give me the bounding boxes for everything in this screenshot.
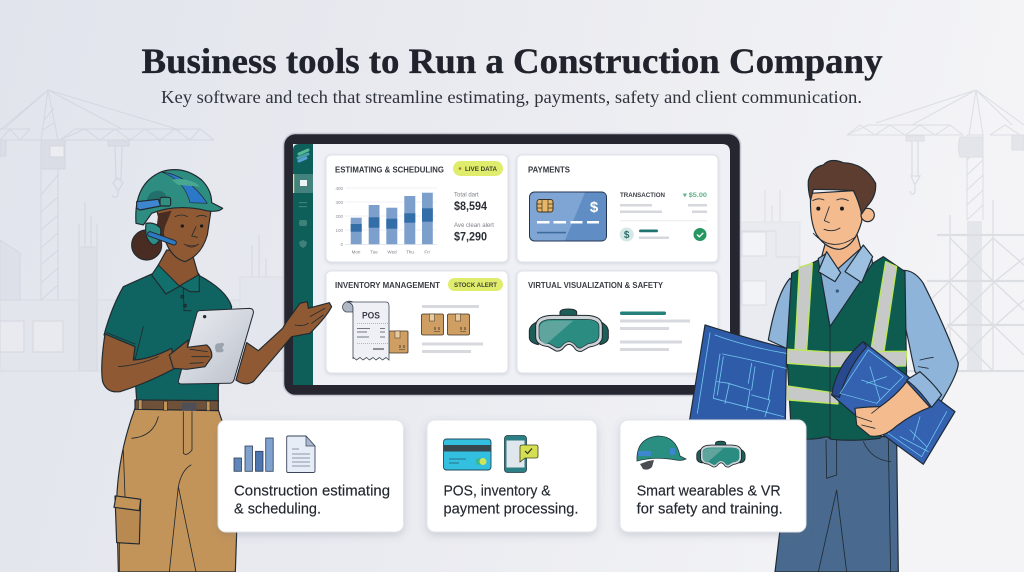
panel: inventory management bbox=[326, 271, 508, 373]
card text: for safety and training. bbox=[637, 502, 783, 518]
panel heading: ESTIMATING & SCHEDULING bbox=[335, 164, 444, 174]
card text: POS, inventory & bbox=[444, 484, 551, 500]
stats: $8,594 bbox=[454, 199, 487, 213]
bar chart: Thu bbox=[406, 250, 414, 254]
left arm bbox=[102, 334, 175, 392]
panel: virtual visualization and safety bbox=[517, 271, 718, 373]
bar chart: 400 bbox=[335, 186, 343, 191]
hair bun bbox=[132, 230, 162, 260]
left arm bbox=[768, 278, 795, 350]
title: Business tools to Run a Construction Company bbox=[142, 41, 882, 81]
pointing arm and hand bbox=[236, 302, 332, 384]
icon: POS receipt: POS bbox=[362, 310, 380, 320]
ear bbox=[861, 208, 874, 222]
transaction details: ▾ $5.00 bbox=[682, 192, 708, 199]
shirt front bbox=[818, 247, 873, 327]
bar chart: 100 bbox=[335, 228, 343, 233]
blueprint sheet bbox=[689, 325, 787, 422]
sidebar icons bbox=[299, 202, 307, 248]
icon: bar chart bbox=[234, 438, 273, 471]
stats: $7,290 bbox=[454, 230, 487, 244]
arm cuff bbox=[907, 372, 942, 407]
bar chart: Mon bbox=[352, 250, 361, 254]
eyes, nose and mouth bbox=[813, 199, 855, 244]
neck bbox=[822, 233, 862, 279]
sidebar bbox=[293, 144, 313, 385]
character: woman with tablet and hard hat bbox=[102, 170, 332, 572]
stats bbox=[454, 192, 494, 244]
card text: payment processing. bbox=[444, 502, 578, 518]
panel heading: INVENTORY MANAGEMENT bbox=[335, 280, 441, 290]
right arm bbox=[900, 270, 958, 403]
rolled blueprint bbox=[832, 342, 955, 464]
bar chart: 300 bbox=[335, 200, 343, 205]
bar chart: Tue bbox=[370, 250, 378, 254]
tablet bbox=[178, 308, 253, 384]
active sidebar item bbox=[293, 174, 313, 193]
tablet frame bbox=[284, 134, 740, 396]
icon: VR goggles bbox=[697, 441, 745, 467]
hard hat bbox=[136, 170, 223, 225]
panel heading: PAYMENTS bbox=[528, 164, 570, 174]
tablet dashboard bbox=[284, 134, 740, 396]
sidebar logo bbox=[298, 150, 308, 161]
card: smart wearables and VR bbox=[620, 420, 806, 532]
background: right crane and scaffold bbox=[740, 90, 1024, 372]
icon: phone with message bbox=[504, 436, 538, 472]
placeholder lines bbox=[422, 305, 483, 353]
placeholder lines bbox=[620, 312, 690, 351]
bar chart bbox=[335, 186, 437, 254]
icon: hard hat bbox=[637, 436, 686, 470]
bar chart: Fri bbox=[424, 250, 430, 254]
panel: payments bbox=[517, 155, 718, 262]
trousers bbox=[114, 408, 237, 572]
panel heading: VIRTUAL VISUALIZATION & SAFETY bbox=[528, 280, 663, 290]
icon: document bbox=[287, 436, 315, 472]
bar chart: 200 bbox=[335, 214, 343, 219]
neck bbox=[158, 250, 198, 286]
face bbox=[810, 190, 864, 249]
vest bbox=[787, 257, 907, 440]
icon: credit card: $ bbox=[590, 199, 599, 216]
shirt collar bbox=[818, 245, 873, 283]
badge: live data: LIVE DATA bbox=[465, 166, 497, 173]
face bbox=[157, 205, 211, 262]
card text: Smart wearables & VR bbox=[637, 484, 781, 500]
badge: stock alert: STOCK ALERT bbox=[454, 282, 497, 289]
stats: Ave clean alert bbox=[454, 223, 494, 229]
badge: live data bbox=[453, 161, 503, 176]
icon: credit card bbox=[444, 439, 491, 470]
icon: box behind receipt bbox=[389, 331, 408, 353]
bar chart: 0 bbox=[340, 242, 343, 247]
subtitle: Key software and tech that streamline estimating, payments, safety and client communication. bbox=[161, 87, 862, 107]
card text: & scheduling. bbox=[234, 502, 321, 518]
hand and forearm bbox=[855, 382, 930, 436]
tablet screen bbox=[293, 144, 730, 385]
eyes, nose and mouth bbox=[175, 215, 207, 247]
polo shirt bbox=[104, 260, 232, 402]
hair bbox=[808, 160, 876, 214]
card text: Construction estimating bbox=[234, 484, 390, 500]
headset bbox=[146, 223, 174, 245]
belt bbox=[135, 400, 218, 411]
background: left crane and building bbox=[0, 90, 283, 371]
icon: VR goggles bbox=[529, 309, 608, 351]
card: POS inventory and payment processing bbox=[427, 420, 597, 532]
icon: credit card bbox=[530, 192, 606, 241]
transaction details: $ bbox=[624, 230, 630, 241]
card: construction estimating and scheduling bbox=[218, 420, 404, 532]
stats: Total dart bbox=[454, 192, 479, 198]
panel: estimating and scheduling bbox=[326, 155, 508, 262]
hand holding tablet bbox=[169, 340, 212, 369]
badge: stock alert bbox=[448, 278, 503, 291]
transaction details: TRANSACTION bbox=[620, 192, 665, 199]
reflective stripes bbox=[788, 262, 907, 404]
transaction details bbox=[620, 192, 708, 242]
bar chart: Wed bbox=[387, 250, 397, 254]
icon: POS receipt bbox=[343, 301, 389, 360]
character: man with vest and blueprints bbox=[689, 160, 958, 572]
icon: stock boxes bbox=[422, 314, 470, 335]
jeans bbox=[775, 437, 898, 572]
